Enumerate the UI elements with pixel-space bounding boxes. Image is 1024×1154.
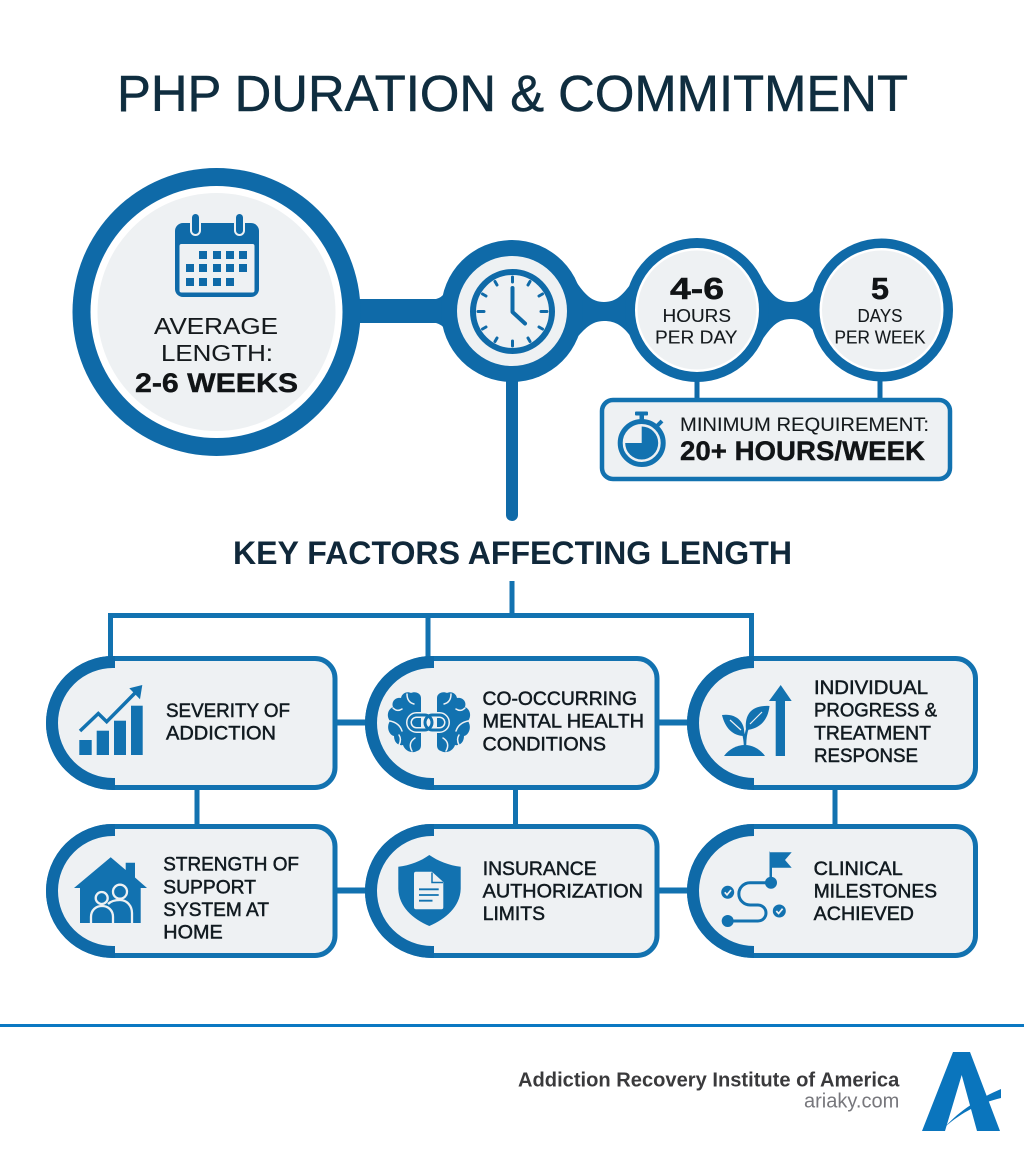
minimum requirement text: MINIMUM REQUIREMENT: [680,414,929,436]
minimum requirement text [680,414,929,466]
title: PHP DURATION & COMMITMENT [117,65,908,122]
co-occurring text [482,688,644,756]
panel: average length circle [72,168,360,456]
days per week text: PER WEEK [834,326,926,348]
footer rule [0,1024,1024,1027]
footer organisation text: Addiction Recovery Institute of America [518,1070,900,1092]
heading: key factors: KEY FACTORS AFFECTING LENGTH [233,535,792,571]
individual progress text [814,677,937,767]
icon: house with family [74,857,147,923]
support system text: STRENGTH OF [163,854,299,876]
icon: calendar [175,213,259,297]
co-occurring text: CO-OCCURRING [482,688,637,710]
hours per day text: PER DAY [655,326,738,348]
severity text: ADDICTION [166,722,276,744]
icon: logo [922,1052,1001,1131]
support system text [163,854,299,943]
minimum requirement text: 20+ HOURS/WEEK [680,436,926,466]
footer organisation text [518,1070,900,1112]
panel: insurance limits [368,826,657,956]
average length text: 2-6 WEEKS [135,368,298,398]
severity text: SEVERITY OF [166,700,290,722]
insurance text: LIMITS [483,903,545,925]
hours per day text: HOURS [662,305,731,326]
individual progress text: PROGRESS & [814,700,937,722]
panel: clinical milestones [690,826,976,956]
panel: co-occurring conditions [368,658,657,788]
average length text: LENGTH: [161,340,273,366]
panel: support system [48,826,335,956]
clinical milestones text: CLINICAL [814,858,903,880]
support system text: SYSTEM AT [163,899,269,921]
icon: rising bar chart [79,685,143,755]
icon: milestone path and flag [721,851,792,927]
severity text [166,700,290,744]
average length text [135,313,298,398]
individual progress text: TREATMENT [814,722,931,744]
icon: clock [473,272,552,351]
icon: brain with chain [388,692,470,752]
clinical milestones text: MILESTONES [814,881,937,903]
icon: shield with document [398,855,461,926]
days per week text [834,271,926,348]
insurance text: INSURANCE [483,858,597,880]
individual progress text: RESPONSE [814,745,918,767]
icon: sprout and arrow [722,685,792,756]
panel: severity of addiction [48,658,335,788]
clinical milestones text: ACHIEVED [814,903,914,925]
co-occurring text: CONDITIONS [482,734,606,756]
clinical milestones text [814,858,937,925]
support system text: HOME [163,921,223,943]
panel: days per week circle [810,238,953,382]
panel: minimum requirement [602,400,950,479]
insurance text [483,858,643,925]
insurance text: AUTHORIZATION [483,881,643,903]
days per week text: 5 [871,271,889,306]
panel: individual progress [690,658,976,788]
panel: clock circle [441,240,583,382]
footer organisation text: ariaky.com [804,1090,899,1112]
tree connectors [110,581,835,890]
average length text: AVERAGE [154,313,278,339]
panel: hours per day circle [625,238,769,382]
icon: stopwatch [620,412,663,464]
hours per day text [655,271,738,348]
individual progress text: INDIVIDUAL [814,677,928,699]
co-occurring text: MENTAL HEALTH [482,711,644,733]
support system text: SUPPORT [163,876,256,898]
connectors between top circles [350,280,882,521]
hours per day text: 4-6 [670,271,724,306]
days per week text: DAYS [858,305,902,326]
